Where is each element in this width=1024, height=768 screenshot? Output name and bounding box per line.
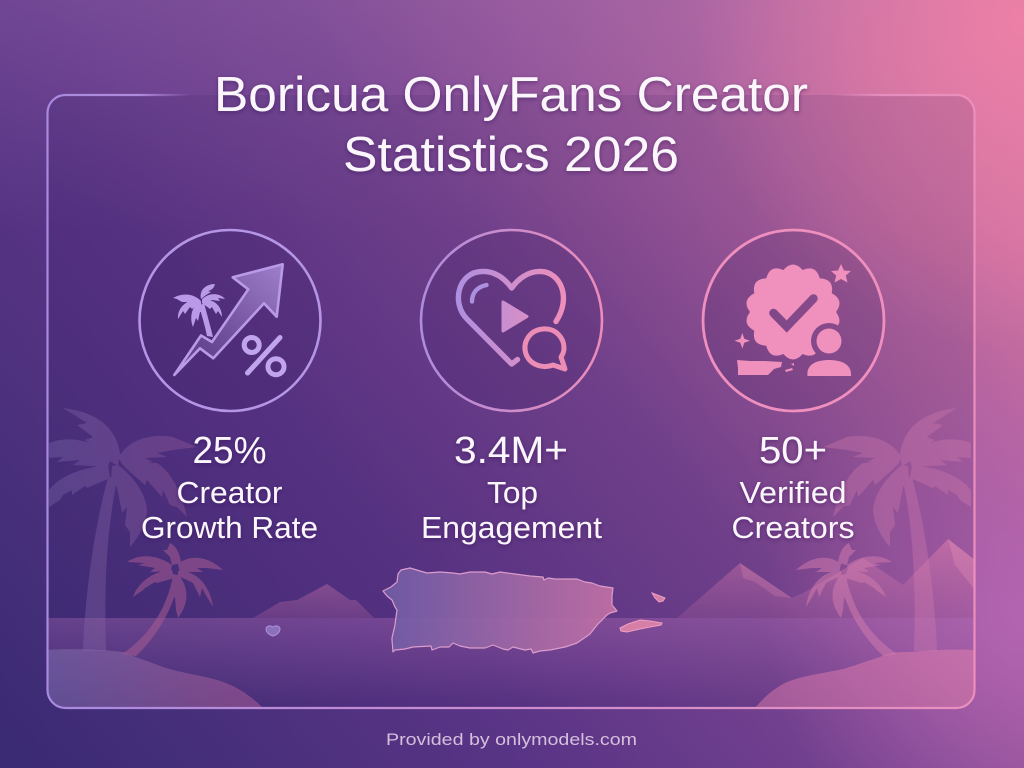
water band (48, 618, 974, 688)
main island (383, 568, 617, 653)
map: Puerto Rico (383, 568, 665, 653)
stat: verified creators (703, 230, 884, 545)
stat label: Creators (732, 510, 854, 545)
palm icon (173, 284, 225, 337)
chat bubble (525, 329, 565, 369)
stat label: Verified (740, 475, 846, 510)
stat label: Top (487, 475, 538, 510)
palm tree right small (796, 543, 897, 656)
stat label: Growth Rate (141, 510, 318, 545)
Vieques island (620, 620, 662, 632)
icon: verified badge with person (703, 230, 884, 411)
island left (48, 649, 263, 708)
mini Puerto Rico (737, 360, 794, 375)
star (831, 264, 851, 282)
stat: top engagement (421, 230, 602, 545)
scene: tropical landscape (48, 408, 975, 708)
stat value: 3.4M+ (454, 430, 568, 472)
palm tree right large (823, 408, 971, 651)
mountains right (677, 539, 975, 618)
island right (755, 650, 975, 708)
play triangle (503, 302, 527, 331)
small heart on water (266, 626, 280, 636)
title: Boricua OnlyFans Creator (214, 68, 808, 122)
heart outline (458, 271, 563, 364)
percent sign (244, 338, 284, 375)
icon: growth arrow with palm and percent (140, 230, 320, 411)
palm tree left large (49, 408, 197, 651)
stat label (421, 475, 602, 545)
icon: heart, play and chat bubble (421, 230, 602, 411)
sparkle (734, 333, 750, 348)
stat label: Creator (176, 475, 282, 510)
Culebra island (652, 593, 665, 602)
stat label (732, 475, 854, 545)
stat value: 50+ (759, 430, 827, 472)
title: Statistics 2026 (343, 128, 679, 182)
panel: glass card (47, 95, 975, 708)
stat label: Engagement (421, 510, 602, 545)
verified badge (747, 264, 839, 360)
heart highlight (472, 285, 486, 302)
panel border (48, 95, 974, 708)
growth arrow (174, 264, 283, 375)
stat: creator growth (140, 230, 320, 545)
palm tree left small (122, 543, 223, 656)
stat value: 25% (192, 430, 266, 472)
person (807, 328, 851, 376)
footer credit: Provided by onlymodels.com (386, 730, 637, 749)
title (214, 68, 808, 182)
mountain left (253, 584, 374, 618)
stat label (141, 475, 318, 545)
